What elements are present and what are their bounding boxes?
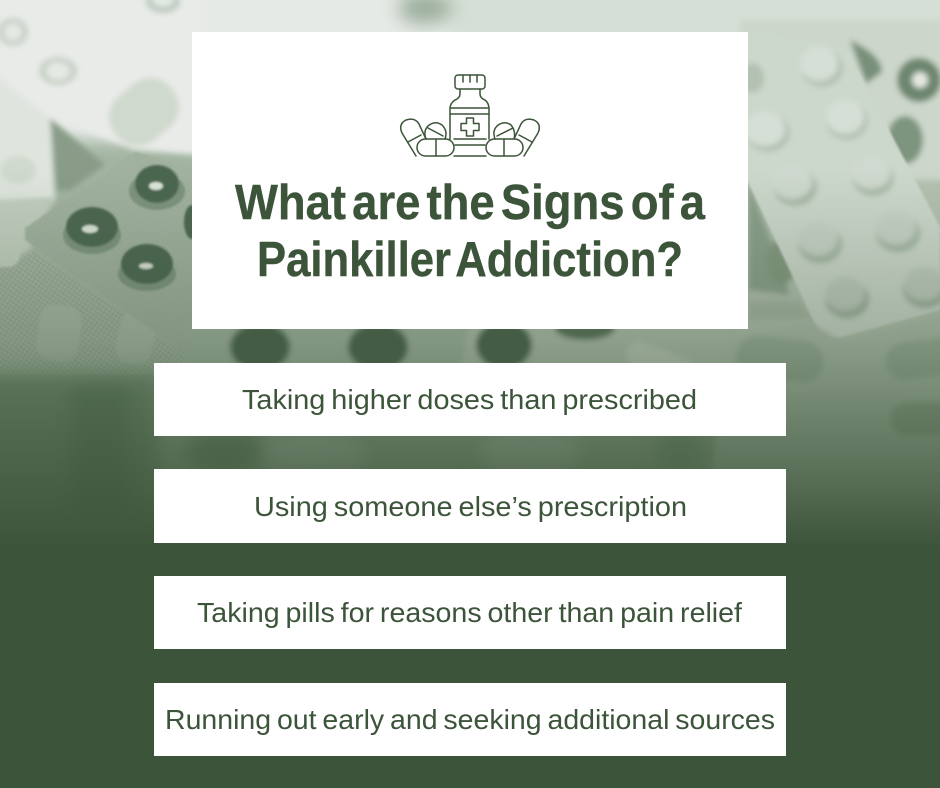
heading line 2: Painkiller Addiction? — [257, 233, 683, 287]
top-left light blister — [0, 0, 200, 205]
panel: title card — [192, 32, 748, 329]
icon: medicine bottle with pills — [401, 75, 539, 156]
lower-left foil blister — [0, 250, 200, 375]
sign 4 — [154, 683, 786, 756]
dark-pill blister, left — [25, 152, 200, 365]
sign 2 — [154, 469, 786, 543]
lower right capsules — [700, 312, 940, 550]
sign 1: Taking higher doses than prescribed — [242, 384, 697, 415]
sign 1 — [154, 363, 786, 436]
center row of pills under title — [185, 316, 760, 387]
right white blister strip — [740, 28, 940, 338]
right side background pills — [740, 20, 940, 350]
sign 3 — [154, 576, 786, 649]
sign 3: Taking pills for reasons other than pain relief — [197, 597, 742, 628]
sign 4: Running out early and seeking additional sources — [165, 704, 775, 735]
lower band shapes — [0, 375, 704, 545]
heading: What are the Signs of a — [235, 176, 706, 230]
sign 2: Using someone else’s prescription — [254, 491, 687, 522]
